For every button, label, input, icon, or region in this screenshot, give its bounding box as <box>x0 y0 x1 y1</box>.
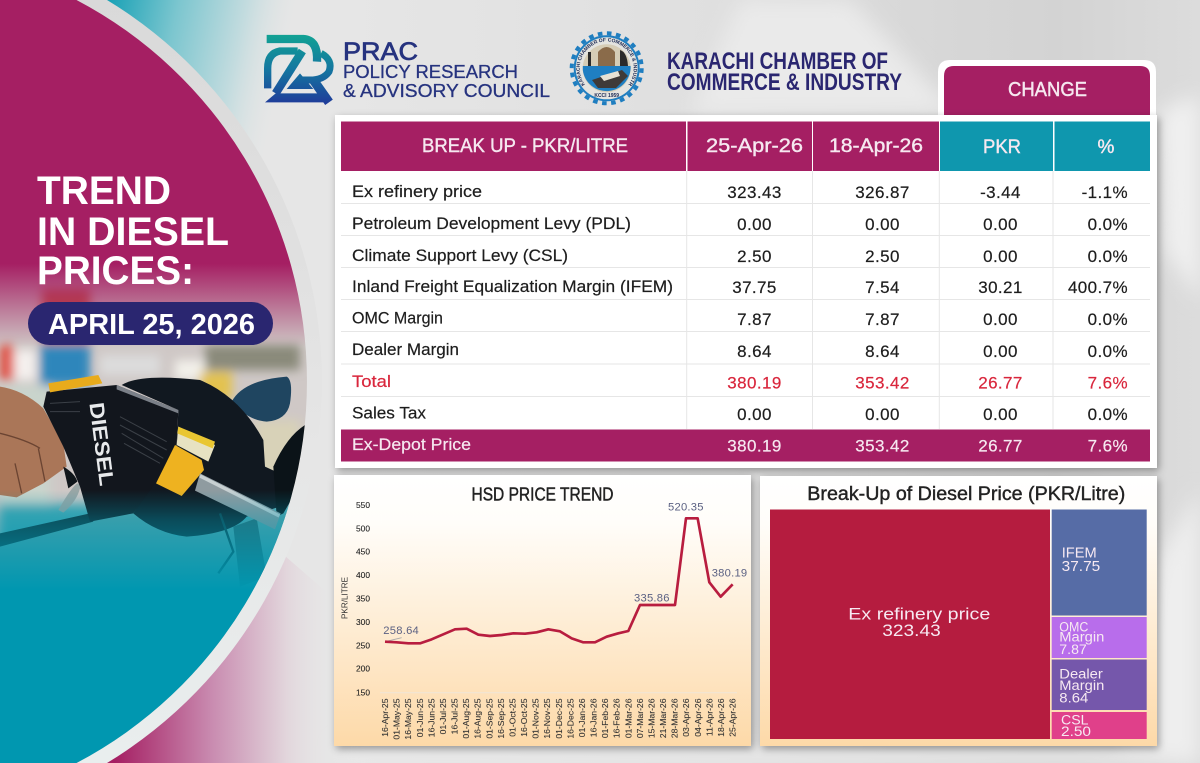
cell: OMC Margin: Margin <box>1059 630 1104 645</box>
table header: % <box>1098 137 1115 158</box>
y axis: 150 <box>356 688 370 698</box>
row: CSL: 2.50 <box>865 247 900 266</box>
PRAC wordmark <box>343 38 550 101</box>
row: Ex-Depot Price: 7.6% <box>1088 436 1128 456</box>
icon: PRAC mark <box>265 39 330 102</box>
x axis labels: 03-Apr-26 <box>681 698 691 737</box>
table panel <box>335 115 1157 468</box>
y axis: 550 <box>356 500 370 510</box>
PRAC logo <box>265 38 550 102</box>
x axis labels: 16-Feb-26 <box>612 698 622 738</box>
data labels: 258.64 <box>383 625 419 637</box>
row: OMC Margin: 0.0% <box>1088 310 1128 329</box>
x axis labels: 01-Feb-26 <box>600 698 610 738</box>
row: IFEM: 30.21 <box>978 278 1023 297</box>
PRAC wordmark: POLICY RESEARCH <box>343 61 518 82</box>
x axis labels: 16-Jan-26 <box>588 698 598 737</box>
data labels: 520.35 <box>668 502 704 514</box>
row: PDL: 0.00 <box>865 215 900 234</box>
cell: Dealer Margin: Margin <box>1059 678 1104 693</box>
row: OMC Margin: 7.87 <box>865 310 900 329</box>
data labels: 335.86 <box>634 593 670 605</box>
row: OMC Margin: 7.87 <box>737 310 772 329</box>
cell: OMC Margin <box>1052 617 1147 658</box>
x axis labels: 16-Apr-25 <box>380 698 390 737</box>
row: Dealer Margin: 8.64 <box>737 342 772 361</box>
row: CSL: 2.50 <box>737 247 772 266</box>
row: Sales Tax: 0.00 <box>865 405 900 424</box>
x axis labels: 16-Oct-25 <box>519 698 529 737</box>
row: OMC Margin <box>352 308 1128 329</box>
row: Ex-Depot Price: Ex-Depot Price <box>352 435 471 454</box>
row: Ex refinery price <box>352 182 1128 202</box>
x axis labels: 01-Mar-26 <box>623 698 633 738</box>
fuel flap <box>122 378 287 537</box>
row: Total: 26.77 <box>978 374 1023 392</box>
row: Total: 380.19 <box>727 374 782 392</box>
KCCI emblem <box>570 31 644 106</box>
x axis labels: 21-Mar-26 <box>658 698 668 738</box>
cell: OMC Margin: OMC <box>1059 620 1089 635</box>
y axis: 200 <box>356 664 370 674</box>
row: Dealer Margin: 0.00 <box>983 342 1018 361</box>
yellow cap <box>48 375 102 392</box>
row: Ex-Depot Price: 26.77 <box>978 436 1023 456</box>
yellow sleeve <box>177 427 215 462</box>
x axis labels: 11-Apr-26 <box>704 698 714 736</box>
row: Dealer Margin: 0.0% <box>1088 342 1128 361</box>
x axis labels: 16-Jun-25 <box>426 698 436 737</box>
car body <box>0 510 303 670</box>
cell: OMC Margin: 7.87 <box>1059 642 1087 657</box>
title: PRICES: <box>37 249 194 293</box>
y axis: 300 <box>356 617 370 627</box>
x axis labels: 15-Mar-26 <box>646 698 656 738</box>
row: Ex refinery price: Ex refinery price <box>352 182 482 201</box>
y axis: PKR/LITRE <box>340 577 350 619</box>
change tab: CHANGE <box>1008 79 1087 101</box>
left circular panel <box>0 0 330 763</box>
table header: 18-Apr-26 <box>829 136 923 157</box>
table header <box>341 122 1150 171</box>
x axis labels: 01-Jul-25 <box>438 698 448 734</box>
cell: CSL <box>1052 712 1147 739</box>
x axis labels: 01-Aug-25 <box>461 698 471 739</box>
date pill: APRIL 25, 2026 <box>48 309 255 341</box>
PRAC wordmark: & ADVISORY COUNCIL <box>343 80 550 101</box>
x axis labels: 01-Jan-26 <box>577 698 587 737</box>
x axis labels: 01-Nov-25 <box>531 698 541 739</box>
date pill <box>28 302 273 345</box>
panel: break-up treemap <box>760 476 1157 746</box>
teal overlay <box>0 492 292 590</box>
row: PDL: 0.00 <box>737 215 772 234</box>
magenta corner <box>90 556 330 763</box>
cell: Dealer Margin <box>1052 660 1147 710</box>
light band around circle <box>0 0 322 763</box>
cell: IFEM <box>1052 510 1147 616</box>
label: DIESEL: DIESEL <box>84 401 118 487</box>
x axis labels <box>380 698 738 740</box>
teal corner <box>90 0 300 300</box>
row: Total: Total <box>352 372 391 391</box>
x axis labels: 04-Apr-26 <box>693 698 703 737</box>
x axis labels: 01-Dec-25 <box>554 698 564 739</box>
x axis labels: 25-Apr-26 <box>728 698 738 737</box>
x axis labels: 16-Jul-25 <box>450 698 460 734</box>
row: Ex refinery price: 323.43 <box>727 183 782 202</box>
KCCI wordmark: COMMERCE & INDUSTRY <box>667 69 902 96</box>
row: Total: 7.6% <box>1088 374 1128 392</box>
cell: Dealer Margin: Dealer <box>1059 666 1103 681</box>
row: PDL: Petroleum Development Levy (PDL) <box>352 214 631 233</box>
steel pipe <box>195 473 281 529</box>
row: Sales Tax: 0.00 <box>737 405 772 424</box>
row: Ex refinery price: 326.87 <box>855 183 910 202</box>
row: PDL: 0.00 <box>983 215 1018 234</box>
row: Ex refinery price: -1.1% <box>1082 183 1128 202</box>
cell: CSL: 2.50 <box>1061 724 1091 739</box>
x axis labels: 16-Dec-25 <box>565 698 575 739</box>
x axis labels: 18-Apr-26 <box>716 698 726 737</box>
photo: diesel nozzle <box>0 282 307 762</box>
data labels <box>383 502 747 637</box>
row: Ex-Depot Price: 353.42 <box>855 436 910 456</box>
cell: Dealer Margin: 8.64 <box>1059 691 1089 706</box>
title <box>37 169 229 293</box>
y axis: 400 <box>356 570 370 580</box>
row: IFEM <box>352 277 1128 297</box>
PRAC wordmark: PRAC <box>343 38 418 66</box>
mirror <box>232 377 291 422</box>
trigger <box>58 483 81 513</box>
x axis labels: 01-May-25 <box>392 698 402 740</box>
row: CSL <box>352 246 1128 266</box>
row: IFEM: 37.75 <box>732 278 777 297</box>
row: IFEM: Inland Freight Equalization Margin (IFEM) <box>352 277 673 296</box>
treemap title: Break-Up of Diesel Price (PKR/Litre) <box>807 484 1125 505</box>
row: Ex-Depot Price <box>341 430 1150 462</box>
x axis labels: 16-May-25 <box>403 698 413 740</box>
title: IN DIESEL <box>37 210 229 254</box>
y axis: 350 <box>356 594 370 604</box>
KCCI wordmark: KARACHI CHAMBER OF <box>667 48 888 75</box>
x axis labels: 28-Mar-26 <box>670 698 680 738</box>
cell: IFEM: 37.75 <box>1062 558 1100 575</box>
row: Sales Tax <box>352 404 1128 424</box>
y axis: 500 <box>356 523 370 533</box>
KCCI emblem: KCCI 1959 <box>594 93 619 99</box>
KCCI wordmark <box>667 48 902 96</box>
row: Total <box>352 372 1128 392</box>
cell: IFEM: IFEM <box>1062 544 1097 561</box>
row: PDL: 0.0% <box>1088 215 1128 234</box>
change tab <box>938 60 1156 116</box>
cell: Ex refinery price: 323.43 <box>882 621 941 640</box>
row: CSL: 0.00 <box>983 247 1018 266</box>
row: Ex refinery price: -3.44 <box>980 183 1021 202</box>
cell: Ex refinery price <box>770 510 1050 739</box>
x axis labels: 07-Mar-26 <box>635 698 645 738</box>
panel: HSD price trend chart <box>334 475 751 746</box>
row: IFEM: 7.54 <box>865 278 900 297</box>
price line <box>385 518 733 643</box>
x axis labels: 16-Nov-25 <box>542 698 552 739</box>
row: Dealer Margin: Dealer Margin <box>352 340 459 359</box>
nozzle body <box>43 385 178 522</box>
chart title: HSD PRICE TREND <box>472 484 614 504</box>
row: CSL: 0.0% <box>1088 247 1128 266</box>
row: CSL: Climate Support Levy (CSL) <box>352 246 568 265</box>
row: PDL <box>352 214 1128 234</box>
row: Sales Tax: 0.0% <box>1088 405 1128 424</box>
row: Total: 353.42 <box>855 374 910 392</box>
hose bar <box>0 513 93 547</box>
y axis: 250 <box>356 640 370 650</box>
y axis: 450 <box>356 547 370 557</box>
table header: PKR <box>983 137 1021 158</box>
x axis labels: 16-Aug-25 <box>473 698 483 739</box>
row: OMC Margin: OMC Margin <box>352 308 443 328</box>
magenta overlay <box>0 0 330 347</box>
row: OMC Margin: 0.00 <box>983 310 1018 329</box>
cell: Ex refinery price: Ex refinery price <box>848 604 990 623</box>
row: Dealer Margin <box>352 340 1128 361</box>
table header: 25-Apr-26 <box>706 136 803 157</box>
cell: CSL: CSL <box>1061 712 1089 727</box>
title: TREND <box>37 169 171 213</box>
hand <box>0 387 67 497</box>
row: Dealer Margin: 8.64 <box>865 342 900 361</box>
row: Sales Tax: Sales Tax <box>352 404 426 422</box>
table header: BREAK UP - PKR/LITRE <box>422 136 628 157</box>
x axis labels: 01-Jun-25 <box>415 698 425 737</box>
row: IFEM: 400.7% <box>1068 278 1128 297</box>
row: Ex-Depot Price: 380.19 <box>727 436 782 456</box>
x axis labels: 01-Oct-25 <box>508 698 518 737</box>
y axis <box>340 500 370 698</box>
x axis labels: 01-Sep-25 <box>484 698 494 739</box>
row: Sales Tax: 0.00 <box>983 405 1018 424</box>
x axis labels: 16-Sep-25 <box>496 698 506 739</box>
data labels: 380.19 <box>712 568 747 580</box>
